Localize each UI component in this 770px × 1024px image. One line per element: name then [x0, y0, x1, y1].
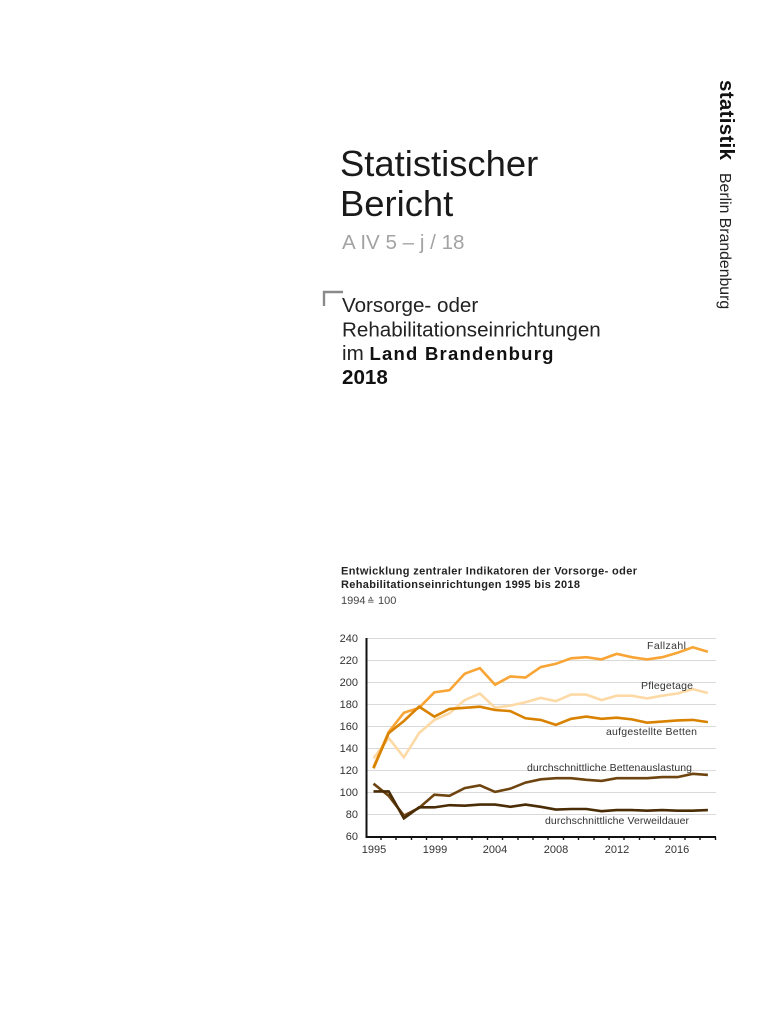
series labels: durchschnittliche Verweildauer [545, 815, 690, 827]
x axis labels: 2004 [483, 844, 507, 856]
report number: A IV 5 – j / 18 [342, 231, 464, 254]
y axis labels: 60 [346, 831, 358, 843]
title: Statistischer [340, 143, 538, 184]
x axis labels: 2016 [665, 844, 689, 856]
icon: corner bracket [324, 292, 343, 306]
x axis labels [362, 844, 689, 856]
line chart [340, 633, 716, 856]
y axis labels [340, 633, 358, 843]
line: durchschnittliche Verweildauer [374, 791, 708, 818]
line: Pflegetage [374, 689, 708, 758]
y axis labels: 160 [340, 721, 358, 733]
series labels: Pflegetage [641, 680, 693, 692]
chart heading [341, 566, 638, 607]
chart subtitle: 1994 [341, 595, 365, 607]
series labels [527, 640, 697, 827]
x axis labels: 2008 [544, 844, 568, 856]
sidebar brand: statistik Berlin Brandenburg [715, 80, 738, 309]
x axis labels: 1999 [423, 844, 447, 856]
subtitle: Rehabilitationseinrichtungen [342, 318, 601, 342]
y axis labels: 220 [340, 655, 358, 667]
y axis labels: 180 [340, 699, 358, 711]
series labels: aufgestellte Betten [606, 726, 697, 738]
y axis labels: 240 [340, 633, 358, 645]
title: Bericht [340, 183, 453, 224]
subtitle: 2018 [342, 366, 388, 389]
chart heading: Rehabilitationseinrichtungen 1995 bis 2018 [341, 579, 580, 591]
data lines [374, 647, 708, 818]
y axis labels: 80 [346, 809, 358, 821]
line: aufgestellte Betten [374, 707, 708, 768]
brand region: Berlin Brandenburg: Berlin Brandenburg [716, 173, 733, 309]
chart subtitle: 100 [378, 595, 396, 607]
title [340, 143, 538, 224]
brand word: statistik: statistik [715, 80, 738, 161]
series labels: Fallzahl [647, 640, 686, 652]
y axis labels: 100 [340, 787, 358, 799]
y axis labels: 200 [340, 677, 358, 689]
chart subtitle: ≙ [367, 596, 375, 606]
x axis labels: 2012 [605, 844, 629, 856]
chart title: Entwicklung zentraler Indikatoren der Vorsorge- oder [341, 566, 638, 578]
y axis labels: 120 [340, 765, 358, 777]
line: durchschnittliche Bettenauslastung [374, 774, 708, 816]
line: Fallzahl [374, 647, 708, 767]
series labels: durchschnittliche Bettenauslastung [527, 762, 692, 774]
subtitle: im Land Brandenburg [342, 342, 553, 365]
subtitle: Vorsorge- oder [342, 294, 478, 317]
y axis labels: 140 [340, 743, 358, 755]
x axis labels: 1995 [362, 844, 386, 856]
subtitle [342, 294, 601, 389]
axes [366, 638, 716, 840]
